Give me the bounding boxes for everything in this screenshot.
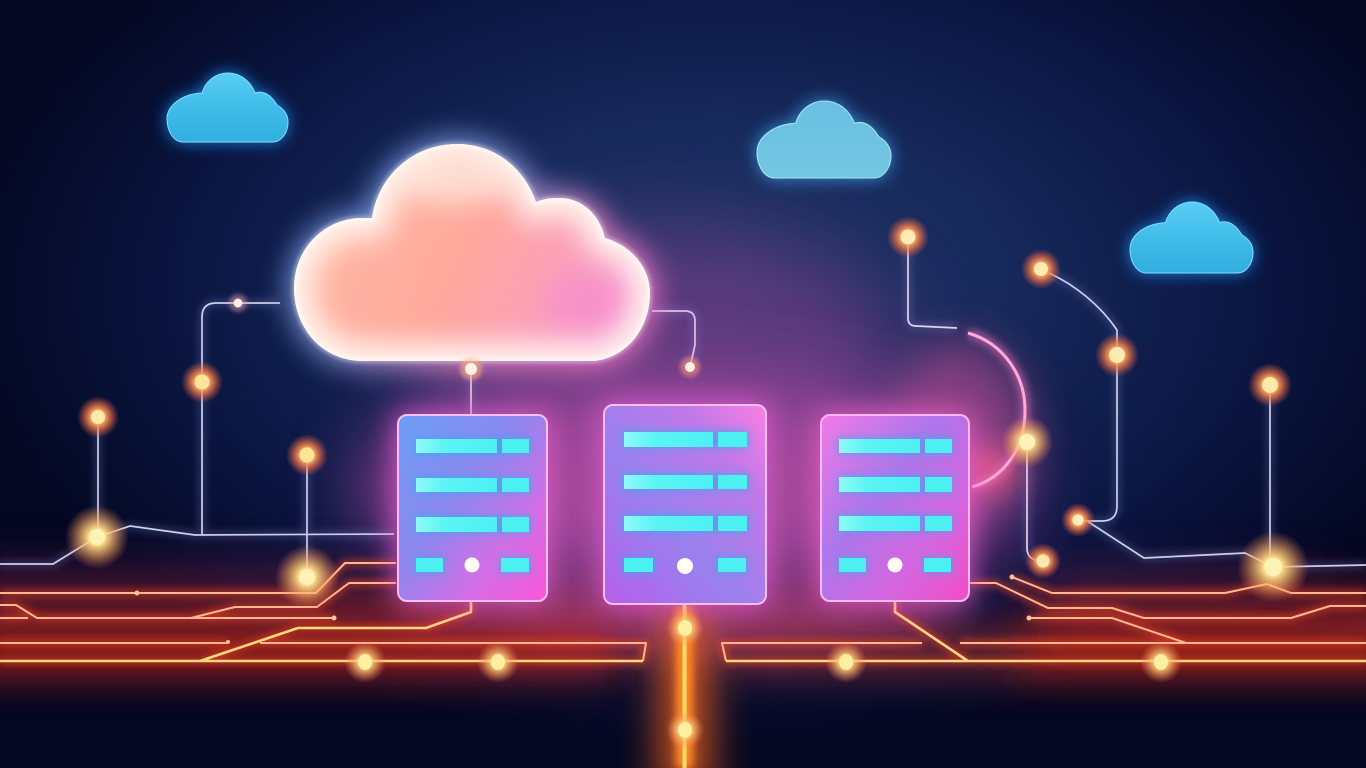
server rack: centre <box>601 402 769 607</box>
main cloud <box>294 144 650 361</box>
pink arc connector <box>968 333 1025 487</box>
thin pale connector lines <box>0 237 1366 577</box>
small trace end dots <box>134 574 1032 644</box>
glowing nodes: large junctions <box>65 416 1309 609</box>
glowing nodes: upper orange <box>77 216 1292 579</box>
central vertical trunk <box>676 605 693 768</box>
server rack: left <box>395 412 550 604</box>
small cloud: top left <box>167 73 288 142</box>
small white nodes <box>229 294 700 380</box>
glowing nodes: bottom traces <box>344 609 1182 749</box>
glowing circuit traces: left <box>0 563 646 661</box>
small cloud: top centre <box>757 101 891 178</box>
main cloud outer glow <box>294 144 650 361</box>
small cloud: right <box>1130 202 1253 273</box>
glowing circuit traces: right <box>722 577 1366 661</box>
server rack: right <box>818 412 972 604</box>
